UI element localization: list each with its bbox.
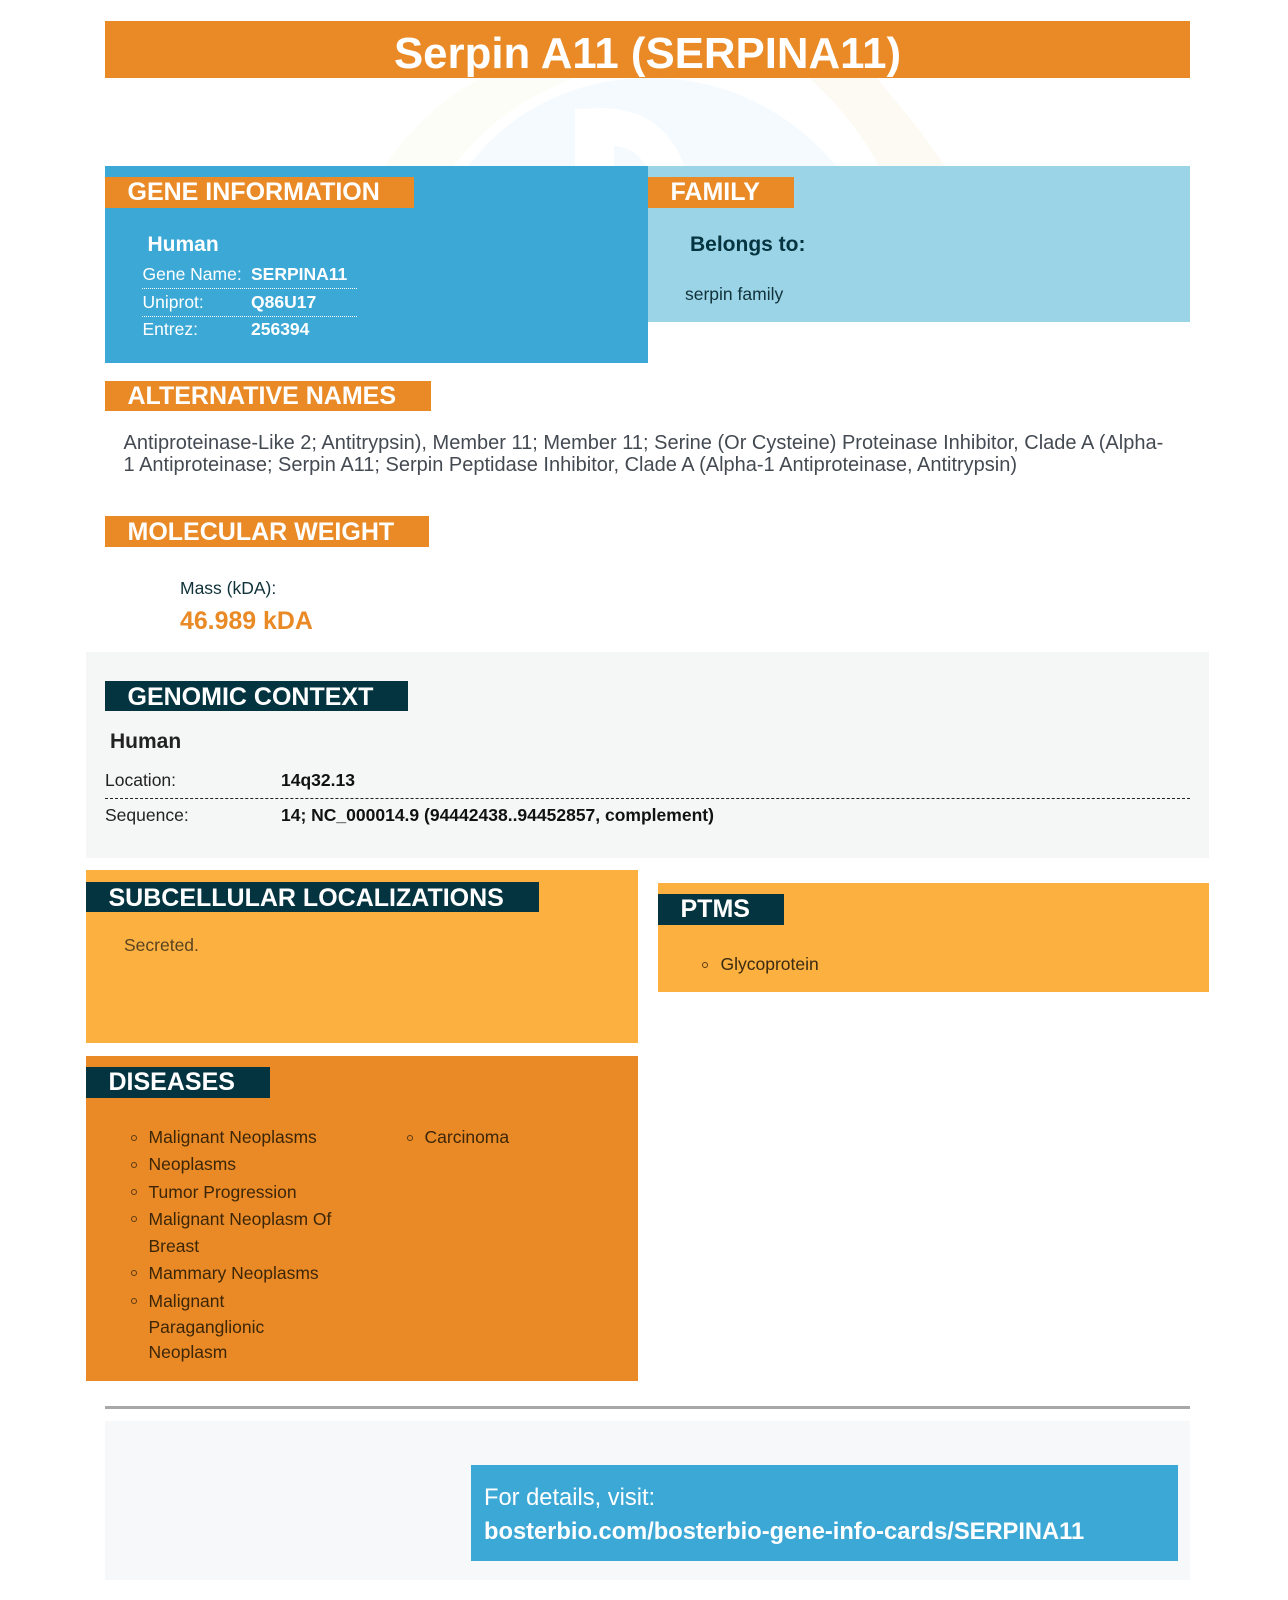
disease list column 1: Tumor Progression xyxy=(148,1182,297,1202)
details url: bosterbio.com/bosterbio-gene-info-cards/SERPINA11 xyxy=(484,1519,1084,1545)
sequence row: Sequence: xyxy=(105,805,189,825)
location row xyxy=(105,764,1190,799)
mass label: Mass (kDA): xyxy=(180,578,276,598)
disease list column 1 xyxy=(131,1127,332,1362)
heading: subcellular localizations: SUBCELLULAR LOCALIZATIONS xyxy=(108,884,504,912)
localization text: Secreted. xyxy=(124,935,199,955)
ptm list item: Glycoprotein xyxy=(720,954,819,974)
location row: Location: xyxy=(105,770,176,790)
sequence row: 14; NC_000014.9 (94442438..94452857, complement) xyxy=(281,805,714,825)
heading: gene information: GENE INFORMATION xyxy=(128,178,380,206)
heading: diseases xyxy=(86,1067,270,1098)
section: alternative names xyxy=(105,381,1163,476)
title banner xyxy=(105,21,1190,78)
details label: For details, visit: xyxy=(484,1485,655,1511)
watermark logo xyxy=(469,78,944,166)
disease list column 1: Malignant xyxy=(148,1291,224,1311)
mass value: 46.989 kDA xyxy=(180,607,313,635)
panel: subcellular localizations xyxy=(86,870,638,1043)
disease list column 1: Neoplasms xyxy=(148,1154,236,1174)
gene name row xyxy=(142,263,357,289)
alternative names text: Antiproteinase-Like 2; Antitrypsin), Member 11; Member 11; Serine (Or Cysteine) Proteinase Inhibitor, Clade A (Alpha- xyxy=(124,432,1163,454)
heading: alternative names: ALTERNATIVE NAMES xyxy=(128,382,396,410)
heading: family: FAMILY xyxy=(670,178,760,206)
title banner: Serpin A11 (SERPINA11) xyxy=(394,29,901,78)
species label: Human xyxy=(148,233,219,256)
species label: Human xyxy=(110,730,181,753)
panel: ptms xyxy=(658,883,1209,992)
entrez row: Entrez: xyxy=(142,319,198,339)
panel: diseases xyxy=(86,1056,638,1381)
gene name row: Gene Name: xyxy=(142,264,242,284)
uniprot row: Uniprot: xyxy=(142,292,204,312)
disease list column 1: Breast xyxy=(148,1236,199,1256)
disease list column 2: Carcinoma xyxy=(424,1127,509,1147)
panel: genomic context xyxy=(86,652,1209,858)
panel: gene information xyxy=(105,166,648,363)
gene name row: SERPINA11 xyxy=(251,264,347,284)
heading: genomic context: GENOMIC CONTEXT xyxy=(128,683,373,711)
callout: details link xyxy=(471,1465,1178,1561)
panel: family xyxy=(648,166,1190,322)
uniprot row: Q86U17 xyxy=(251,292,316,312)
heading: ptms xyxy=(658,894,784,925)
disease list column 1: Malignant Neoplasms xyxy=(148,1127,317,1147)
family name: serpin family xyxy=(685,284,783,304)
uniprot row xyxy=(142,290,357,317)
belongs to label: Belongs to: xyxy=(690,233,806,256)
heading: molecular weight: MOLECULAR WEIGHT xyxy=(128,518,394,546)
disease list column 1: Neoplasm xyxy=(148,1342,227,1362)
disease list column 1: Mammary Neoplasms xyxy=(148,1263,319,1283)
location row: 14q32.13 xyxy=(281,770,355,790)
section: molecular weight xyxy=(105,516,429,635)
entrez row xyxy=(142,319,310,339)
entrez row: 256394 xyxy=(251,319,309,339)
disease list column 1: Paraganglionic xyxy=(148,1316,264,1336)
alternative names text xyxy=(124,432,1163,476)
heading: family xyxy=(648,177,794,208)
disease list column 1: Malignant Neoplasm Of xyxy=(148,1209,331,1229)
panel: footer xyxy=(105,1421,1190,1580)
heading: diseases: DISEASES xyxy=(108,1068,235,1096)
heading: ptms: PTMS xyxy=(680,895,750,923)
alternative names text: 1 Antiproteinase; Serpin A11; Serpin Peptidase Inhibitor, Clade A (Alpha-1 Antiproteinase, Antitrypsin) xyxy=(124,454,1017,476)
